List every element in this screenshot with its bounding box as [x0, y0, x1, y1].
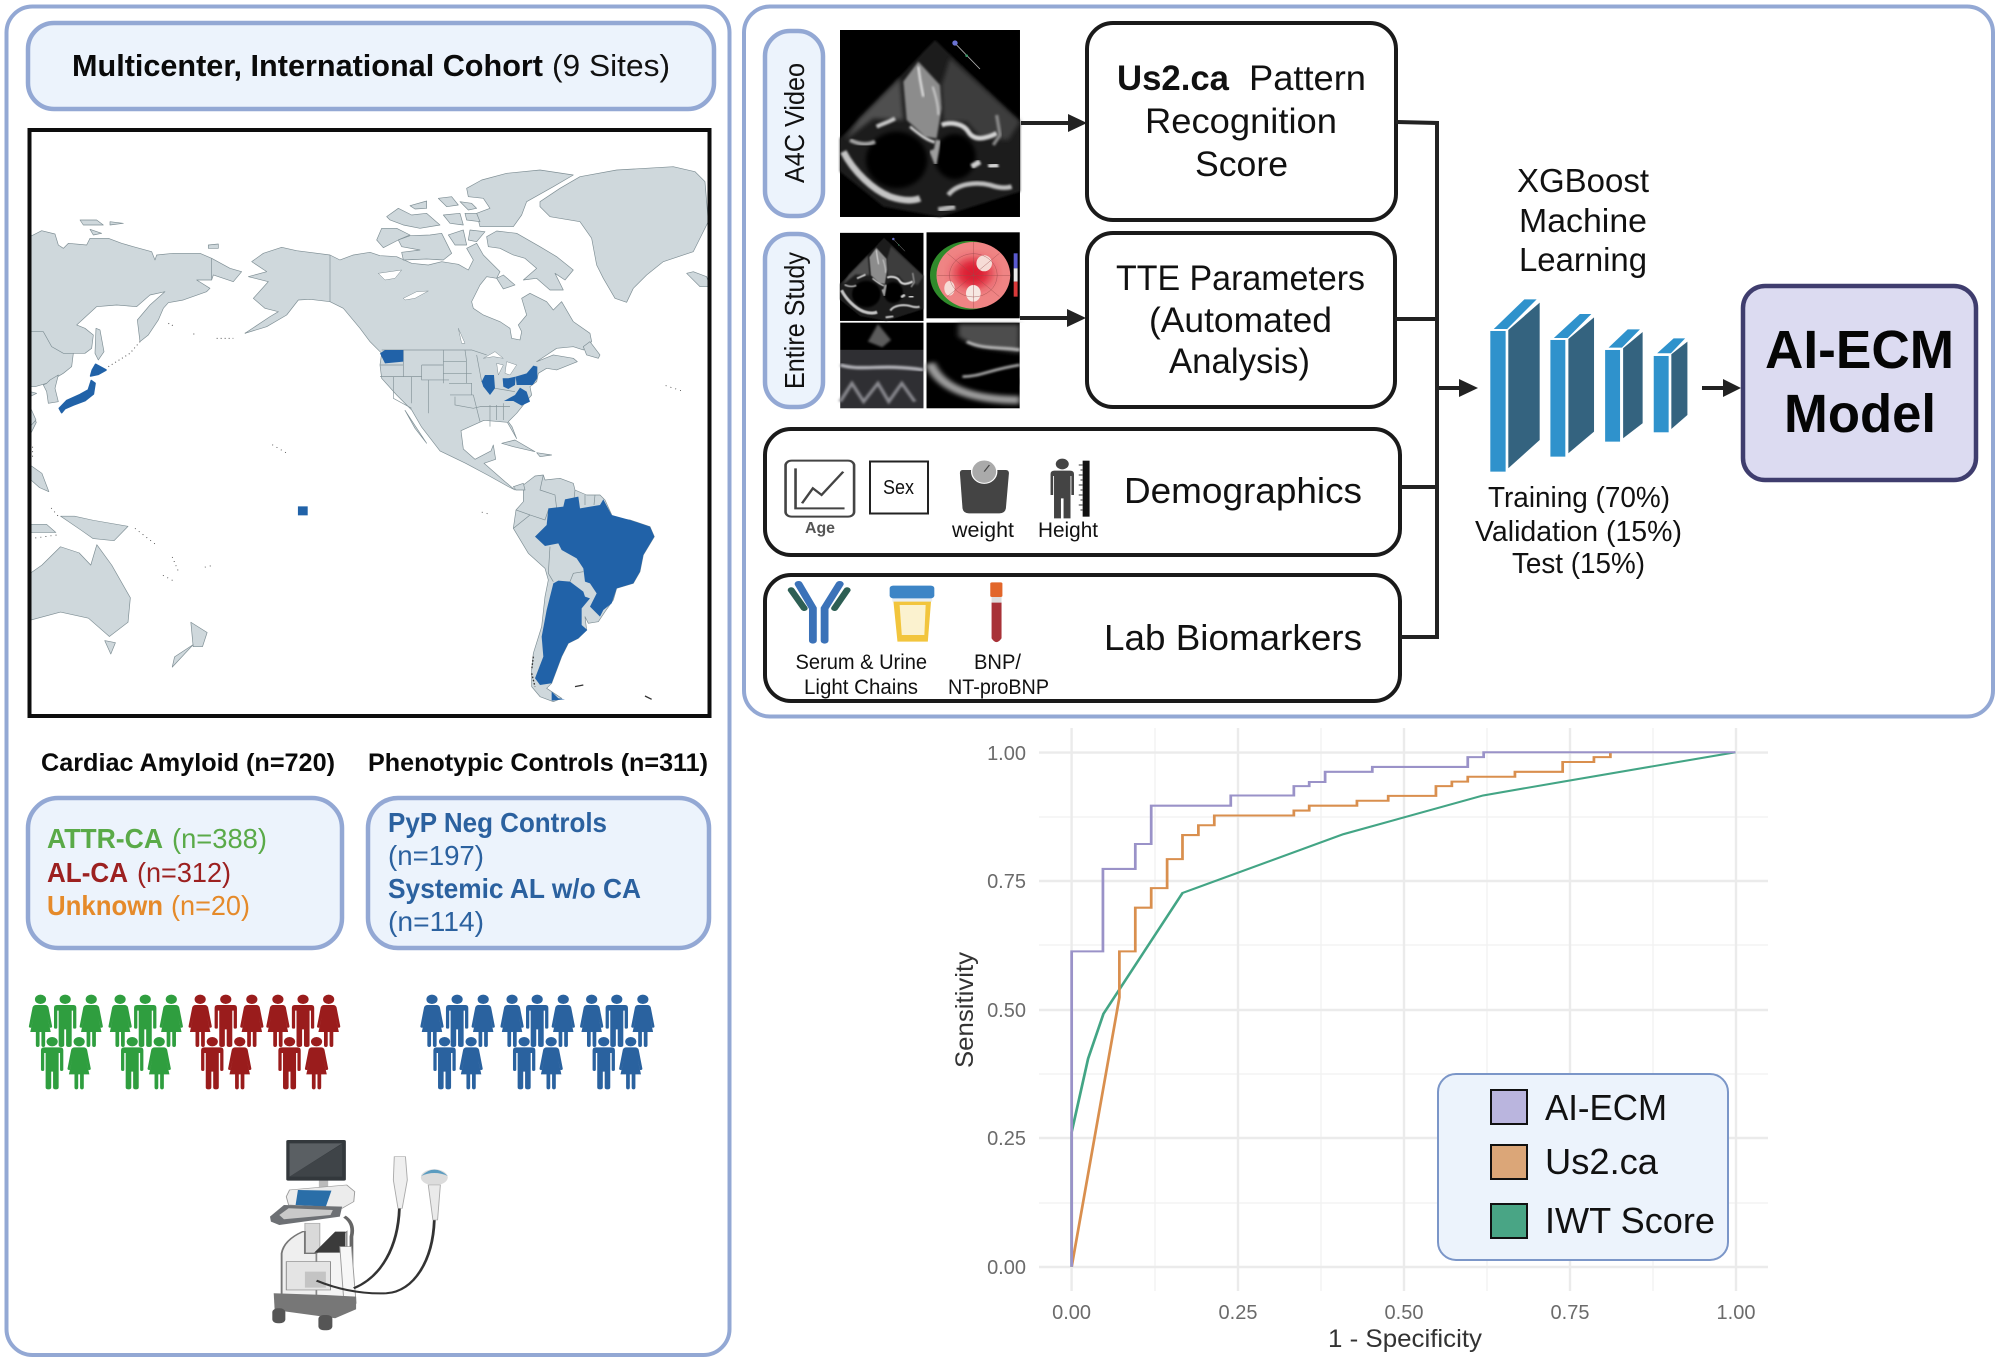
heading: multicenter international cohort: (9 Sites) — [552, 48, 670, 83]
box: Us2.ca pattern recognition score: Pattern — [1249, 59, 1366, 98]
south america — [502, 440, 654, 702]
label pill: Entire Study — [765, 234, 823, 407]
label: demographics: Demographics — [1124, 470, 1362, 511]
y axis title: Sensitivity — [951, 951, 979, 1068]
box: cardiac amyloid subtypes: (n=20) — [171, 890, 250, 921]
chart: ROC curves — [951, 728, 1768, 1353]
icon: weight scale — [960, 460, 1009, 513]
box: cardiac amyloid subtypes: (n=312) — [137, 857, 231, 888]
heading: XGBoost machine learning — [1517, 162, 1649, 278]
icon: height person and ruler — [1051, 459, 1090, 518]
label: BNP NT-proBNP: NT-proBNP — [948, 676, 1049, 699]
icon: sex box — [870, 462, 928, 514]
image: apical four chamber echo — [840, 30, 1020, 217]
connector: inputs merged into XGBoost — [1395, 122, 1478, 637]
x axis tick labels: 0.25 — [1219, 1302, 1257, 1324]
legend: AI-ECM — [1545, 1087, 1667, 1128]
label pill: A4C Video — [765, 31, 823, 216]
label: lab biomarkers: Lab Biomarkers — [1104, 617, 1362, 658]
label pill: A4C Video: A4C Video — [779, 63, 810, 183]
box: cardiac amyloid subtypes: (n=388) — [172, 823, 267, 854]
cohort heading: cardiac amyloid: Cardiac Amyloid (n=720) — [41, 749, 335, 777]
heading: XGBoost machine learning: Machine — [1519, 202, 1647, 239]
curve: IWT score — [1072, 752, 1735, 1267]
icon: blood tube — [990, 582, 1002, 642]
box: cardiac amyloid subtypes: AL-CA — [47, 857, 128, 888]
icon: age chart — [786, 461, 854, 517]
eastern asia — [32, 220, 246, 426]
x axis tick labels: 0.00 — [1052, 1302, 1091, 1324]
y axis tick labels: 1.00 — [987, 743, 1026, 765]
heading: XGBoost machine learning: XGBoost — [1517, 162, 1649, 199]
box: Us2.ca pattern recognition score — [1087, 23, 1396, 220]
label: weight: weight — [951, 519, 1014, 542]
text: data split — [1475, 482, 1682, 580]
label: BNP NT-proBNP — [948, 651, 1049, 699]
x axis title: 1 - Specificity — [1328, 1325, 1483, 1353]
box: AI-ECM model: Model — [1784, 384, 1936, 444]
box: AI-ECM model — [1743, 286, 1976, 480]
label: serum and urine light chains: Light Chains — [804, 676, 918, 699]
box: Us2.ca pattern recognition score: Score — [1195, 145, 1288, 184]
box: phenotypic control subtypes — [368, 798, 709, 948]
icon: ultrasound machine — [270, 1140, 448, 1330]
box: TTE parameters: TTE Parameters — [1116, 259, 1365, 298]
world map with study sites — [29, 130, 710, 716]
y axis tick labels: 0.00 — [987, 1257, 1026, 1279]
box: cardiac amyloid subtypes: ATTR-CA — [47, 823, 163, 854]
legend: Us2.ca — [1545, 1141, 1659, 1182]
text: data split: Test (15%) — [1512, 548, 1645, 580]
box: phenotypic control subtypes: (n=197) — [388, 840, 484, 871]
box: phenotypic control subtypes: Systemic AL w/o CA — [388, 873, 641, 904]
label: serum and urine light chains — [796, 651, 927, 699]
panel: cohort — [6, 6, 730, 1355]
box: phenotypic control subtypes: (n=114) — [388, 906, 484, 937]
north america and greenland — [245, 167, 710, 490]
heading: multicenter international cohort: Multicenter, International Cohort — [72, 48, 543, 83]
text: data split: Validation (15%) — [1475, 516, 1682, 548]
box: TTE parameters: Analysis) — [1169, 342, 1310, 381]
icon group: patient pictograms — [29, 995, 654, 1089]
label: height: Height — [1038, 519, 1098, 542]
curve: AI-ECM — [1072, 752, 1735, 1267]
label pill: Entire Study: Entire Study — [779, 252, 810, 389]
box: TTE parameters — [1087, 233, 1395, 407]
arrow: A4C video to pattern recognition score — [1021, 114, 1087, 132]
chart grid — [1039, 728, 1768, 1291]
label: serum and urine light chains: Serum & Urine — [796, 651, 927, 674]
panel: model pipeline — [744, 6, 1993, 716]
icon: neural network blocks — [1490, 299, 1687, 472]
y axis tick labels: 0.75 — [987, 871, 1026, 893]
legend: IWT Score — [1545, 1200, 1715, 1241]
box: cardiac amyloid subtypes: Unknown — [47, 890, 163, 921]
box: cardiac amyloid subtypes — [28, 798, 342, 948]
box: AI-ECM model: AI-ECM — [1765, 320, 1954, 380]
label: age: Age — [805, 520, 835, 537]
box: TTE parameters: (Automated — [1149, 301, 1332, 340]
legend — [1438, 1074, 1728, 1260]
arrow: entire study to TTE parameters — [1020, 309, 1086, 327]
box: lab biomarkers — [765, 575, 1400, 701]
heading: multicenter international cohort — [28, 23, 714, 109]
y axis tick labels — [987, 743, 1026, 1279]
curve: Us2.ca — [1072, 752, 1610, 1267]
arrow: network to AI-ECM model — [1702, 379, 1741, 397]
heading: XGBoost machine learning: Learning — [1519, 241, 1647, 278]
text: data split: Training (70%) — [1488, 482, 1670, 514]
icon: antibody light chains — [791, 584, 847, 641]
x axis tick labels: 1.00 — [1717, 1302, 1755, 1324]
icon: sex box: Sex — [883, 477, 914, 499]
icon: urine cup — [890, 586, 934, 642]
x axis tick labels — [1052, 1302, 1755, 1324]
y axis tick labels: 0.25 — [987, 1128, 1026, 1150]
label: BNP NT-proBNP: BNP/ — [974, 651, 1021, 674]
box: Us2.ca pattern recognition score: Recognition — [1145, 102, 1337, 141]
y axis tick labels: 0.50 — [987, 1000, 1026, 1022]
cohort heading: phenotypic controls: Phenotypic Controls (n=311) — [368, 749, 708, 777]
box: demographics — [765, 429, 1400, 555]
x axis tick labels: 0.75 — [1551, 1302, 1589, 1324]
x axis tick labels: 0.50 — [1385, 1302, 1423, 1324]
remaining pacific land in overview coordinates — [30, 386, 684, 667]
image group: full echo study — [840, 232, 1028, 408]
box: phenotypic control subtypes: PyP Neg Controls — [388, 807, 607, 838]
box: Us2.ca pattern recognition score: Us2.ca — [1117, 59, 1230, 98]
